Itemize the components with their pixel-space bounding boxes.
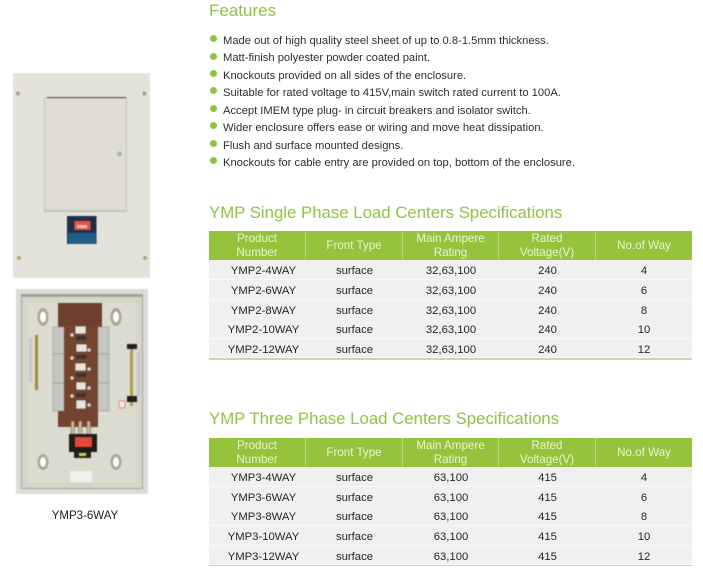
table: three phase specifications: 415 bbox=[538, 551, 557, 563]
table: three phase specifications: 12 bbox=[638, 551, 650, 563]
table: single phase specifications: No.of Way bbox=[617, 239, 671, 252]
table: single phase specifications: 240 bbox=[538, 285, 557, 297]
table: three phase specifications: 63,100 bbox=[434, 531, 468, 543]
table: single phase specifications: Rating bbox=[434, 246, 467, 258]
feature 8: Knockouts for cable entry are provided on top, bottom of the enclosure. bbox=[223, 157, 575, 169]
feature 4: Suitable for rated voltage to 415V,main switch rated current to 100A. bbox=[223, 87, 561, 99]
feature 7: Flush and surface mounted designs. bbox=[223, 140, 403, 152]
table: single phase specifications: 4 bbox=[641, 265, 647, 277]
table: three phase specifications: 4 bbox=[641, 472, 647, 484]
table: single phase specifications: 6 bbox=[641, 285, 647, 297]
feature 6: Wider enclosure offers ease or wiring and move heat dissipation. bbox=[223, 122, 544, 134]
table: three phase specifications: 63,100 bbox=[434, 472, 468, 484]
table: three phase specifications: Main Ampere bbox=[416, 439, 485, 452]
photo: closed enclosure bbox=[12, 72, 150, 278]
heading: Features: Features bbox=[209, 1, 276, 20]
table: single phase specifications: Front Type bbox=[326, 239, 382, 252]
photo: open enclosure interior bbox=[16, 288, 148, 494]
table: single phase specifications: 240 bbox=[538, 265, 557, 277]
feature 5: Accept IMEM type plug- in circuit breakers and isolator switch. bbox=[223, 104, 531, 116]
table: three phase specifications: Voltage(V) bbox=[520, 452, 574, 466]
table: three phase specifications: Rated bbox=[532, 439, 562, 452]
table: single phase specifications: surface bbox=[336, 285, 373, 297]
table: three phase specifications bbox=[209, 438, 692, 566]
table: three phase specifications: YMP3-10WAY bbox=[228, 531, 299, 543]
table: single phase specifications: 8 bbox=[641, 305, 647, 317]
table: single phase specifications: YMP2-12WAY bbox=[228, 344, 299, 356]
table: single phase specifications: Product bbox=[237, 232, 277, 245]
table: single phase specifications: YMP2-10WAY bbox=[228, 324, 299, 336]
table: single phase specifications: 32,63,100 bbox=[426, 265, 476, 277]
feature 1: Made out of high quality steel sheet of up to 0.8-1.5mm thickness. bbox=[223, 34, 549, 46]
table: three phase specifications: 415 bbox=[538, 511, 557, 523]
table: single phase specifications: 32,63,100 bbox=[426, 285, 476, 297]
table: three phase specifications: 63,100 bbox=[434, 492, 468, 504]
table: three phase specifications: surface bbox=[336, 511, 373, 523]
table: single phase specifications: 32,63,100 bbox=[426, 324, 476, 336]
caption: YMP3-6WAY: YMP3-6WAY bbox=[52, 510, 118, 522]
table: single phase specifications: surface bbox=[336, 305, 373, 317]
table: single phase specifications: Main Ampere bbox=[416, 232, 485, 245]
table: three phase specifications: Product bbox=[237, 439, 277, 452]
table: three phase specifications: surface bbox=[336, 472, 373, 484]
table: three phase specifications: 63,100 bbox=[434, 511, 468, 523]
table: three phase specifications: 415 bbox=[538, 472, 557, 484]
table: single phase specifications: 240 bbox=[538, 305, 557, 317]
table: single phase specifications: 10 bbox=[638, 324, 650, 336]
heading: single phase table: YMP Single Phase Load Centers Specifications bbox=[209, 203, 562, 222]
table: single phase specifications: surface bbox=[336, 324, 373, 336]
table: single phase specifications: YMP2-6WAY bbox=[231, 285, 296, 297]
table: three phase specifications: Front Type bbox=[326, 446, 382, 459]
table: three phase specifications: 8 bbox=[641, 511, 647, 523]
table: three phase specifications: surface bbox=[336, 492, 373, 504]
table: three phase specifications: YMP3-8WAY bbox=[231, 511, 296, 523]
feature 3: Knockouts provided on all sides of the enclosure. bbox=[223, 70, 466, 82]
table: single phase specifications: surface bbox=[336, 344, 373, 356]
table: single phase specifications: YMP2-4WAY bbox=[231, 265, 296, 277]
table: single phase specifications: 240 bbox=[538, 324, 557, 336]
table: single phase specifications: 32,63,100 bbox=[426, 344, 476, 356]
table: three phase specifications: Rating bbox=[434, 452, 467, 466]
table: three phase specifications: YMP3-12WAY bbox=[228, 551, 299, 563]
table: single phase specifications: YMP2-8WAY bbox=[231, 305, 296, 317]
table: three phase specifications: 415 bbox=[538, 492, 557, 504]
table: single phase specifications: 240 bbox=[538, 344, 557, 356]
table: three phase specifications: 10 bbox=[638, 531, 650, 543]
table: three phase specifications: 63,100 bbox=[434, 551, 468, 563]
features list bbox=[210, 34, 575, 169]
table: three phase specifications: 415 bbox=[538, 531, 557, 543]
table: single phase specifications: Number bbox=[236, 246, 278, 258]
feature 2: Matt-finish polyester powder coated paint. bbox=[223, 52, 430, 64]
heading: three phase table: YMP Three Phase Load Centers Specifications bbox=[209, 409, 559, 428]
table: single phase specifications: 12 bbox=[638, 344, 650, 356]
table: single phase specifications bbox=[209, 231, 692, 360]
table: three phase specifications: YMP3-4WAY bbox=[231, 472, 296, 484]
table: single phase specifications: 32,63,100 bbox=[426, 305, 476, 317]
table: three phase specifications: surface bbox=[336, 551, 373, 563]
table: three phase specifications: Number bbox=[236, 452, 278, 466]
table: three phase specifications: 6 bbox=[641, 492, 647, 504]
table: three phase specifications: surface bbox=[336, 531, 373, 543]
table: single phase specifications: Rated bbox=[532, 232, 562, 245]
table: single phase specifications: surface bbox=[336, 265, 373, 277]
table: single phase specifications: Voltage(V) bbox=[520, 246, 574, 258]
table: three phase specifications: No.of Way bbox=[617, 446, 671, 459]
table: three phase specifications: YMP3-6WAY bbox=[231, 492, 296, 504]
